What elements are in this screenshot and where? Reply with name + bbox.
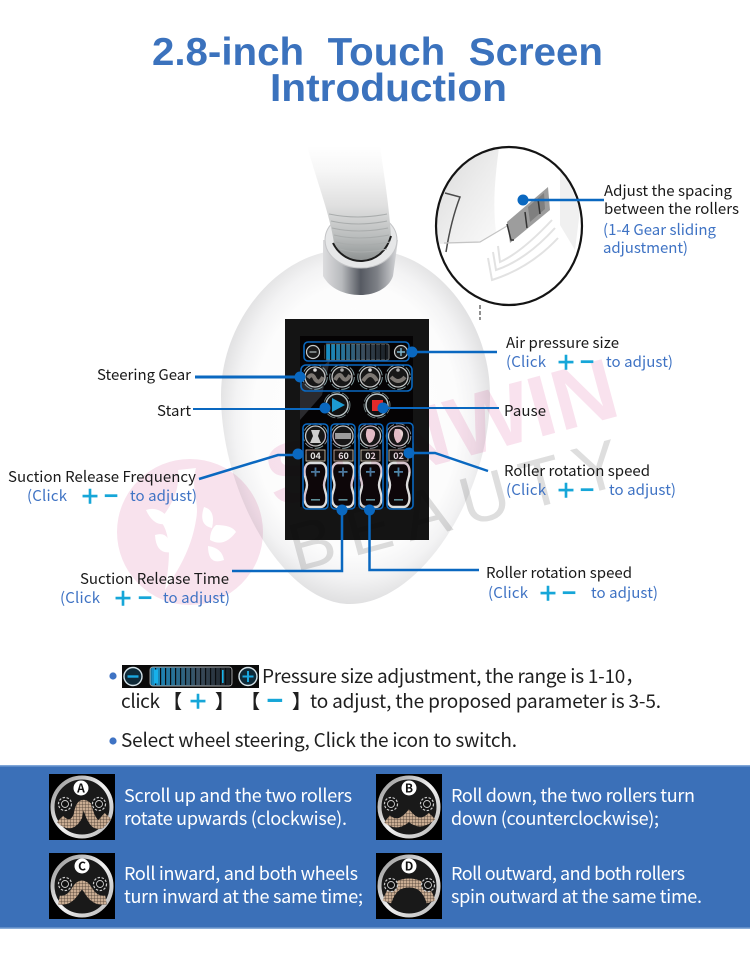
- mode C: [49, 853, 363, 919]
- callout: roller rotation speed lower: (Click: [488, 582, 529, 603]
- callout: air pressure size: −: [580, 348, 594, 376]
- mode D: spin outward at the same time.: [451, 883, 702, 909]
- icon: mode C: C: [78, 858, 86, 874]
- callout: suction release time: [60, 504, 348, 615]
- parameter columns: 02: [365, 449, 376, 462]
- note: wheel steering: Select wheel steering, Click the icon to switch.: [121, 726, 517, 753]
- callout: start: [157, 400, 330, 421]
- egg body: [221, 250, 490, 604]
- start button: [324, 392, 350, 418]
- callout: suction release time: +: [114, 582, 132, 615]
- steering buttons: [301, 365, 412, 391]
- note: pressure size adjustment: [109, 662, 661, 718]
- callout: roller rotation speed upper: [404, 448, 676, 507]
- callout: suction release time: Suction Release Time: [80, 568, 229, 589]
- callout: pause: [378, 400, 546, 421]
- callout: suction release time: −: [138, 584, 152, 612]
- mode D: Roll outward, and both rollers: [451, 860, 685, 886]
- callout: roller rotation speed upper: Roller rotation speed: [504, 460, 650, 481]
- icon: mode A: A: [76, 780, 85, 796]
- mode D: [376, 853, 702, 919]
- callout: air pressure size: (Click: [506, 351, 547, 372]
- note: pressure size adjustment: +: [189, 685, 207, 718]
- touch screen panel: [285, 319, 429, 540]
- mode C: Roll inward, and both wheels: [124, 860, 358, 886]
- callout: air pressure size: [406, 332, 673, 379]
- callout: roller rotation speed upper: to adjust): [609, 479, 676, 500]
- mode B: [376, 774, 695, 840]
- callout: roller rotation speed upper: +: [557, 474, 575, 507]
- callout: roller rotation speed upper: (Click: [506, 479, 547, 500]
- callout: suction release time: to adjust): [163, 587, 230, 608]
- mode A: [49, 774, 352, 840]
- callout: suction release frequency: Suction Release Frequency: [8, 466, 196, 487]
- callout: suction release frequency: [8, 448, 304, 513]
- callout: suction release frequency: −: [104, 482, 118, 510]
- mode B: Roll down, the two rollers turn: [451, 782, 695, 808]
- callout: air pressure size: +: [557, 346, 575, 379]
- icon: pressure bar: [122, 665, 259, 688]
- note: pressure size adjustment: 【: [163, 687, 182, 714]
- icon: mode A: [49, 774, 115, 840]
- title: [152, 31, 603, 110]
- callout: start: Start: [157, 400, 191, 421]
- note: pressure size adjustment: to adjust, the proposed parameter is 3-5.: [310, 687, 661, 714]
- note: pressure size adjustment: 】: [292, 687, 311, 714]
- title: 2.8-inch Touch Screen: [152, 31, 603, 74]
- callout: air pressure size: Air pressure size: [506, 332, 619, 353]
- icon: mode B: [376, 774, 442, 840]
- callout: roller rotation speed upper: −: [580, 476, 594, 504]
- callout: roller spacing: [518, 180, 739, 258]
- callout: suction release time: (Click: [60, 587, 101, 608]
- icon: mode B: B: [405, 780, 413, 796]
- icon: mode C: [49, 853, 115, 919]
- device: handheld body with hose: [221, 146, 490, 604]
- parameter columns: 60: [338, 449, 349, 462]
- icon: mode D: [376, 853, 442, 919]
- note: pressure size adjustment: −: [267, 685, 283, 717]
- callout: roller rotation speed lower: Roller rotation speed: [486, 562, 632, 583]
- callout: roller rotation speed lower: +: [539, 577, 557, 610]
- note: pressure size adjustment: Pressure size adjustment, the range is 1-10，: [262, 662, 644, 689]
- panel: wheel steering modes: [0, 765, 750, 929]
- lens: magnified roller spacing slider: [430, 140, 582, 320]
- callout: steering gear: Steering Gear: [97, 364, 191, 385]
- watermark: brand logo and name: BEAUTY: [280, 425, 628, 586]
- metal collar: [323, 240, 398, 295]
- mode A: rotate upwards (clockwise).: [124, 805, 347, 831]
- callout: roller spacing: Adjust the spacing: [604, 180, 733, 201]
- callout: steering gear: [97, 364, 306, 385]
- callout: roller rotation speed lower: to adjust): [591, 582, 658, 603]
- parameter columns: [303, 423, 413, 509]
- mode B: down (counterclockwise);: [451, 805, 659, 831]
- mode C: turn inward at the same time;: [124, 883, 363, 909]
- note: pressure size adjustment: 【: [241, 687, 260, 714]
- callout: roller rotation speed lower: −: [562, 579, 576, 607]
- note: pressure size adjustment: 】: [215, 687, 234, 714]
- pause button: [364, 392, 390, 418]
- mode A: Scroll up and the two rollers: [124, 782, 352, 808]
- note: pressure size adjustment: click: [121, 687, 160, 714]
- parameter columns: 04: [310, 449, 321, 462]
- callout: roller spacing: between the rollers: [604, 198, 739, 219]
- callout: pause: Pause: [504, 400, 546, 421]
- title: Introduction: [270, 67, 507, 110]
- callout: air pressure size: to adjust): [606, 351, 673, 372]
- callout: suction release frequency: to adjust): [130, 485, 197, 506]
- callout: roller spacing: adjustment): [603, 237, 688, 258]
- icon: mode D: D: [405, 858, 413, 874]
- pressure bar: [304, 342, 409, 361]
- watermark: brand logo and name: [117, 340, 628, 605]
- callout: suction release frequency: (Click: [27, 485, 68, 506]
- parameter columns: 02: [393, 449, 404, 462]
- watermark: brand logo and name: SUNWIN: [255, 340, 628, 526]
- hose: [307, 146, 391, 261]
- callout: suction release frequency: +: [81, 480, 99, 513]
- callout: roller rotation speed lower: [364, 504, 658, 610]
- callout: roller spacing: (1-4 Gear sliding: [603, 219, 717, 240]
